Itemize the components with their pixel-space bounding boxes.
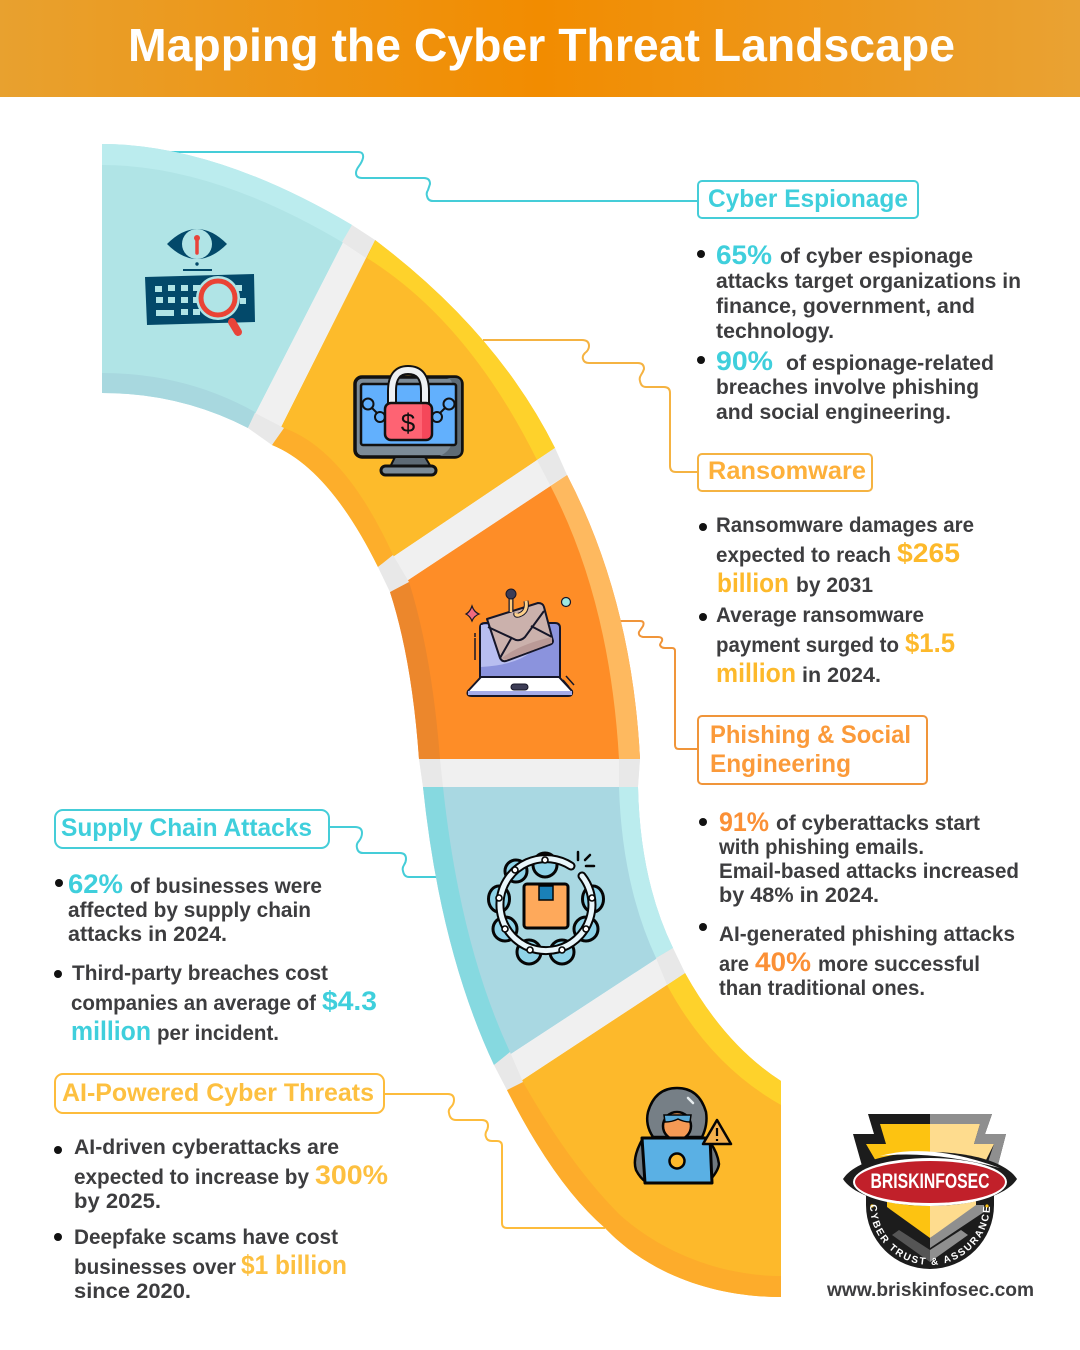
text block: supply chain stats: million — [71, 1016, 151, 1046]
text block: AI threat stats: businesses over — [74, 1256, 236, 1279]
text block: cyber espionage stats: of espionage-related — [786, 352, 994, 375]
text block: phishing stats: by 48% in 2024. — [719, 884, 879, 907]
text block: phishing stats: of cyberattacks start — [776, 812, 980, 835]
header banner — [0, 0, 1080, 97]
text block: cyber espionage stats: attacks target organizations in — [716, 270, 1021, 293]
heading: supply chain attacks: Supply Chain Attacks — [61, 814, 312, 842]
text block: supply chain stats: 62% — [68, 869, 123, 899]
text block: ransomware stats: $265 — [897, 538, 960, 568]
text block: ransomware stats: in 2024. — [802, 664, 881, 687]
segment: phishing — [390, 475, 640, 759]
icon: ransomware monitor — [355, 370, 462, 475]
text block: ransomware stats — [699, 514, 974, 688]
text block: cyber espionage stats: of cyber espionage — [780, 245, 973, 268]
text block: phishing stats: are — [719, 953, 749, 976]
curved ribbon — [102, 144, 781, 1297]
heading: ransomware: Ransomware — [708, 457, 866, 485]
logo: briskinfosec shield — [843, 1114, 1017, 1269]
text block: AI threat stats: AI-driven cyberattacks are — [74, 1136, 339, 1159]
connector: AI threats — [384, 1094, 605, 1228]
text block: cyber espionage stats: technology. — [716, 320, 834, 343]
website url: www.briskinfosec.com — [826, 1280, 1034, 1301]
logo tagline: CYBER TRUST & ASSURANCE — [870, 1204, 990, 1265]
text block: supply chain stats: attacks in 2024. — [68, 923, 227, 946]
text block: AI threat stats: since 2020. — [74, 1280, 191, 1303]
text block: cyber espionage stats: 65% — [716, 240, 772, 270]
title: Mapping the Cyber Threat Landscape — [128, 19, 955, 71]
text block: phishing stats: Email-based attacks increased — [719, 860, 1019, 883]
text block: phishing stats: than traditional ones. — [719, 977, 925, 1000]
text block: ransomware stats: $1.5 — [905, 628, 955, 658]
connector: ransomware — [483, 340, 697, 472]
heading: phishing and social engineering: Engineering — [710, 750, 851, 778]
text block: AI threat stats: 300% — [315, 1160, 388, 1190]
text block: supply chain stats: companies an average of — [71, 992, 317, 1015]
text block: phishing stats: 91% — [719, 807, 769, 837]
logo: briskinfosec shield: BRISKINFOSEC — [870, 1170, 990, 1193]
text block: phishing stats: with phishing emails. — [718, 836, 924, 859]
connector: supply chain — [329, 827, 436, 877]
text block: phishing stats: 40% — [755, 947, 811, 977]
heading: cyber espionage: Cyber Espionage — [708, 185, 908, 213]
segment: AI threats — [507, 973, 781, 1297]
heading: ransomware — [698, 454, 872, 491]
text block: ransomware stats: billion — [717, 568, 789, 598]
connector: phishing — [620, 621, 697, 749]
separators — [248, 225, 685, 1090]
segment: ransomware — [272, 240, 555, 567]
heading: AI-powered cyber threats: AI-Powered Cyber Threats — [62, 1079, 374, 1107]
text block: phishing stats — [699, 807, 1019, 1000]
text block: ransomware stats: expected to reach — [716, 544, 891, 567]
segment: cyber espionage — [102, 144, 352, 428]
text block: cyber espionage stats: finance, government, and — [716, 295, 975, 318]
text block: cyber espionage stats: and social engineering. — [716, 401, 951, 424]
text block: AI threat stats: by 2025. — [74, 1190, 161, 1213]
connector: cyber espionage — [170, 152, 697, 201]
heading: phishing and social engineering: Phishing & Social — [710, 721, 911, 749]
text block: AI threat stats: expected to increase by — [74, 1166, 309, 1189]
text block: phishing stats: more successful — [818, 953, 980, 976]
icon: broken supply chain — [488, 852, 604, 964]
text block: ransomware stats: Ransomware damages are — [716, 514, 974, 537]
text block: supply chain stats: $4.3 — [322, 986, 377, 1016]
text block: ransomware stats: million — [716, 658, 796, 688]
text block: supply chain stats: Third-party breaches cost — [72, 962, 328, 985]
text block: supply chain stats — [54, 869, 377, 1046]
text block: AI threat stats — [54, 1136, 388, 1303]
icon: hooded hacker with laptop — [635, 1088, 731, 1183]
text block: ransomware stats: by 2031 — [796, 574, 873, 597]
text block: supply chain stats: of businesses were — [130, 875, 322, 898]
heading: phishing and social engineering — [698, 716, 927, 784]
text block: cyber espionage stats — [697, 240, 1021, 424]
icon: phishing laptop and envelope — [466, 589, 574, 696]
segment: supply chain — [423, 787, 673, 1065]
heading: AI-powered cyber threats — [55, 1074, 384, 1113]
heading: supply chain attacks — [55, 810, 329, 848]
text block: cyber espionage stats: breaches involve phishing — [716, 376, 979, 399]
text block: phishing stats: AI-generated phishing attacks — [719, 923, 1015, 946]
text block: ransomware stats: Average ransomware — [716, 604, 924, 627]
icon: eye and keyboard — [145, 229, 255, 332]
icon: ransomware monitor: $ — [401, 408, 416, 438]
text block: AI threat stats: $1 billion — [241, 1250, 347, 1280]
text block: ransomware stats: payment surged to — [716, 634, 899, 657]
text block: cyber espionage stats: 90% — [716, 346, 773, 376]
text block: AI threat stats: Deepfake scams have cost — [74, 1226, 338, 1249]
text block: supply chain stats: affected by supply chain — [68, 899, 311, 922]
text block: supply chain stats: per incident. — [157, 1022, 279, 1045]
